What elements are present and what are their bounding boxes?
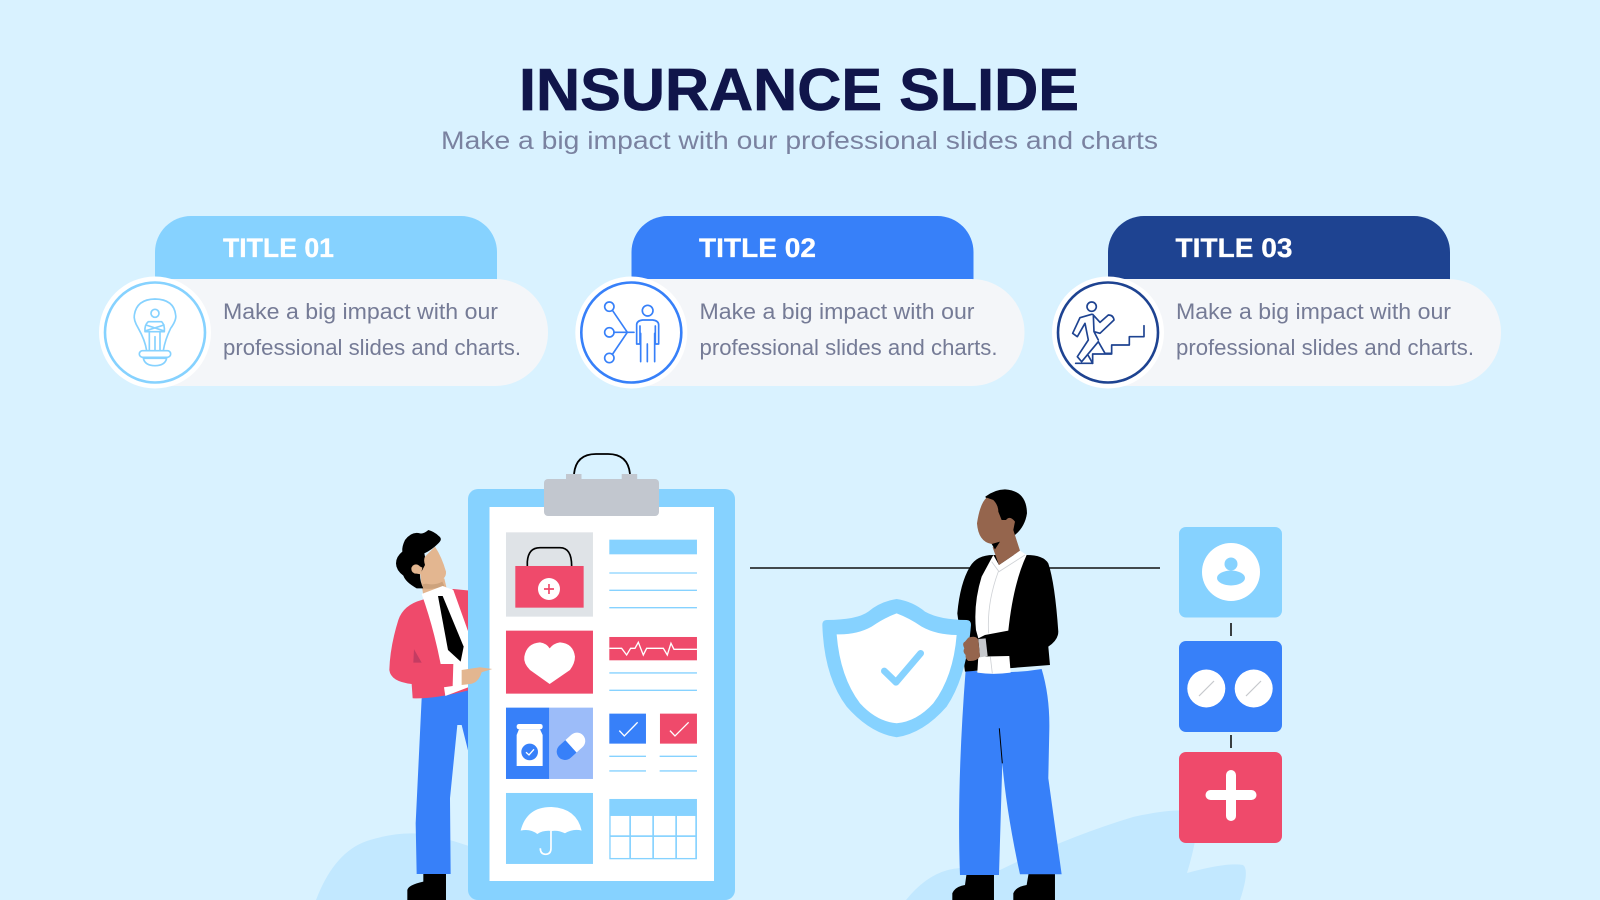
text pill 01 — [112, 279, 548, 386]
icon: plus tile — [1179, 752, 1282, 843]
shirt — [975, 551, 1027, 638]
neck and face — [977, 498, 1020, 565]
body text 01: Make a big impact with our — [223, 299, 498, 324]
connector ticks — [1230, 623, 1232, 748]
title tab 02 — [632, 216, 974, 285]
panel: card 02 — [575, 216, 1024, 388]
clipboard — [468, 454, 735, 900]
illustration: man with shield — [822, 489, 1062, 900]
head and neck — [396, 530, 447, 596]
subtitle: Make a big impact with our professional slides and charts — [441, 127, 1158, 155]
hand — [963, 637, 980, 661]
panel: card 03 — [1052, 216, 1501, 388]
background blob left — [316, 833, 480, 900]
hair — [985, 489, 1027, 535]
icon column — [1179, 527, 1282, 843]
icon: user tile — [1179, 527, 1282, 618]
list lines — [609, 540, 697, 608]
background blob right — [906, 810, 1246, 900]
trousers — [959, 669, 1062, 875]
text pill 02 — [588, 279, 1024, 386]
table — [609, 799, 697, 859]
tile: umbrella — [506, 793, 593, 864]
title tab 01 — [155, 216, 497, 285]
body text 03: Make a big impact with our — [1176, 299, 1451, 324]
shield — [822, 599, 971, 737]
clip — [544, 474, 659, 516]
trousers — [416, 688, 470, 874]
text pill 03 — [1065, 279, 1501, 386]
clipboard paper — [490, 507, 714, 881]
shoe — [407, 874, 446, 900]
shoes — [952, 873, 1055, 900]
heartbeat chart — [609, 637, 697, 690]
body text 02: Make a big impact with our — [700, 299, 974, 324]
cuff — [978, 638, 988, 657]
icon: pills tile — [1179, 641, 1282, 732]
title: INSURANCE SLIDE — [519, 57, 1079, 123]
jacket pocket shadow — [413, 649, 422, 663]
tie — [438, 596, 464, 662]
tile: heart — [506, 631, 593, 694]
title tab 03 — [1108, 216, 1450, 285]
tile: medical bag — [506, 532, 593, 617]
heading 01: TITLE 01 — [223, 233, 334, 263]
heading 03: TITLE 03 — [1176, 233, 1292, 263]
jacket — [389, 589, 470, 698]
panel: card 01 — [99, 216, 548, 388]
clipboard board — [468, 489, 735, 900]
jacket — [957, 555, 1058, 672]
clip handle — [574, 454, 630, 474]
tile: medicine bottle and capsule — [506, 708, 593, 779]
illustration: man in pink jacket (body behind clipboard) — [389, 530, 470, 900]
icon: person climbing stairs — [1052, 276, 1164, 388]
shirt — [422, 586, 470, 696]
pointing hand — [462, 667, 492, 685]
connector line — [750, 567, 1160, 569]
body text 01: professional slides and charts. — [223, 335, 521, 360]
heading 02: TITLE 02 — [699, 233, 816, 263]
icon: network and person — [575, 276, 687, 388]
body text 02: professional slides and charts. — [700, 335, 998, 360]
icon: person in light bulb — [99, 276, 211, 388]
body text 03: professional slides and charts. — [1176, 335, 1474, 360]
checkboxes — [609, 714, 697, 771]
